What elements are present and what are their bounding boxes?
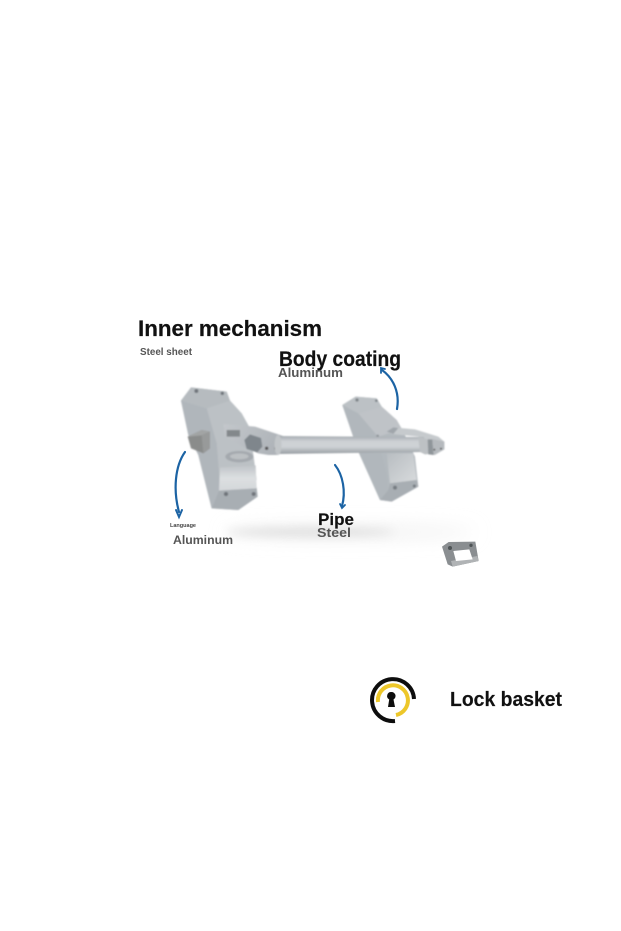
right lock body	[342, 397, 418, 502]
label: Aluminum, body: Aluminum	[278, 365, 343, 380]
left handle socket	[223, 424, 285, 455]
label: Steel: Steel	[317, 525, 351, 540]
right pipe bend	[387, 427, 444, 455]
outer black arc	[372, 679, 414, 721]
label: Steel sheet: Steel sheet	[140, 347, 193, 358]
label: Aluminum, left: Aluminum	[173, 533, 233, 547]
arrow: to Pipe	[335, 465, 345, 508]
floor shadow	[225, 527, 475, 537]
heading: Inner mechanism: Inner mechanism	[138, 316, 322, 341]
part: square lock basket	[442, 542, 479, 567]
heading: Pipe: Pipe	[318, 511, 354, 529]
arrow: to Body coating	[381, 368, 398, 409]
left lock body	[181, 387, 285, 510]
icon: keyhole badge	[372, 679, 414, 721]
left side latch	[188, 430, 210, 453]
arrow: left, to Language	[176, 452, 185, 517]
label: Language: Language	[170, 523, 196, 529]
heading: Body coating: Body coating	[279, 348, 401, 371]
inner yellow arc	[378, 685, 408, 715]
pipe end cap	[418, 437, 444, 455]
product: lock mechanism	[181, 387, 444, 510]
label: Lock basket: Lock basket	[450, 689, 562, 711]
keyhole	[387, 692, 396, 707]
pipe	[277, 436, 424, 454]
